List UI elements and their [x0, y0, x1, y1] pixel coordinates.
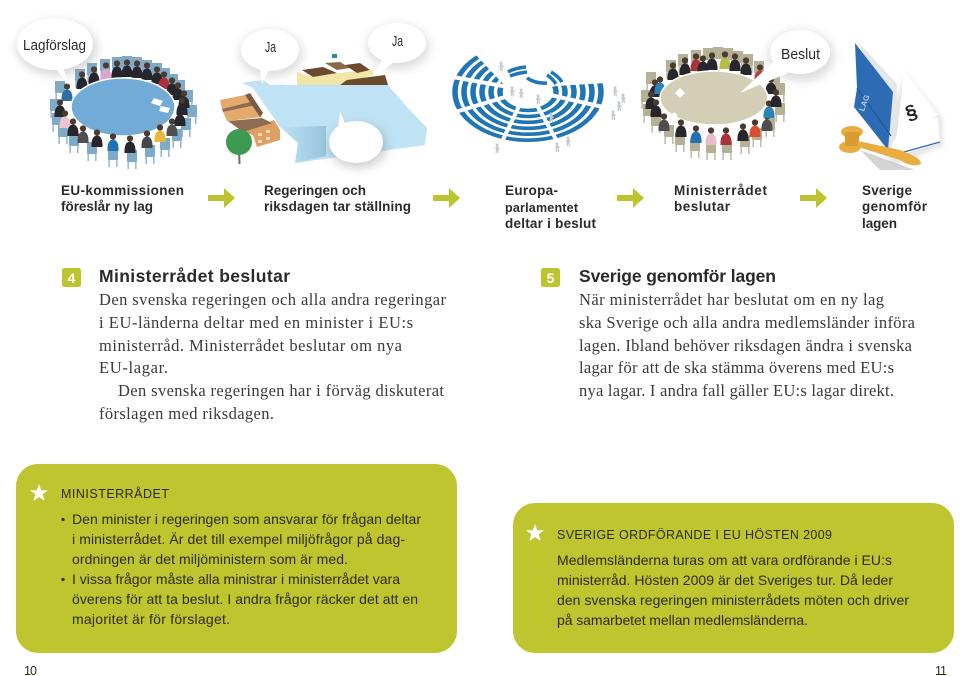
seated people: EU-kommissionen [54, 59, 190, 128]
aisle cuts [442, 75, 616, 152]
front people: EU-kommissionen [67, 97, 188, 153]
chairs: EU-kommissionen [50, 56, 198, 169]
body text 4: i EU-länderna deltar med en minister i EU:s [99, 313, 413, 332]
arrow 1 [208, 188, 235, 208]
label: Europaparlamentet: parlamentet [505, 201, 579, 215]
section 4: Ministerrådet beslutar [62, 266, 446, 423]
heading 5: Sverige genomför lagen [579, 266, 776, 286]
top seat arcs [508, 67, 562, 84]
box bullet text: i ministerrådet. Är det till exempel miljöfrågor på dag- [72, 531, 405, 547]
book shadow [880, 72, 943, 165]
illustration: Ministerrådet round table [640, 47, 786, 160]
riksdag building [297, 54, 388, 85]
front people: Ministerrådet [658, 89, 782, 145]
body text 5 [579, 290, 916, 400]
badge 5 [541, 268, 560, 287]
book cover [854, 43, 893, 150]
speech bubble: Lagförslag: Lagförslag [23, 37, 86, 54]
speech bubble: Ja regeringen [240, 29, 302, 84]
erased upper area [440, 30, 622, 88]
spine label: LAG [857, 93, 872, 112]
label: Regeringen och riksdagen: riksdagen tar ställning [264, 199, 411, 214]
box bullet text: ordningen är det miljöministern som är med. [72, 551, 348, 567]
body text 4: ministerråd. Ministerrådet beslutar om nya [99, 336, 403, 355]
body text 5: lagar för att de ska stämma överens med EU:s [579, 358, 894, 377]
book pages [888, 117, 940, 157]
blue map shape [242, 80, 427, 163]
body text 4: Den svenska regeringen har i förväg diskuterat [118, 381, 444, 400]
arrow 3 [617, 188, 644, 208]
label: Regeringen och riksdagen: Regeringen och [264, 183, 366, 198]
speech bubble: Lagförslag [17, 18, 97, 85]
heading 4: Ministerrådet beslutar [99, 266, 290, 286]
box bullet text: I vissa frågor måste alla ministrar i ministerrådet vara [72, 571, 400, 587]
body text 4: EU-lagar. [99, 358, 168, 377]
box text [557, 552, 909, 628]
label: Sverige genomför lagen: lagen [862, 216, 897, 231]
arrow 2 [433, 188, 460, 208]
body text 4: förslagen med riksdagen. [99, 404, 274, 423]
gavel [839, 126, 921, 170]
speech bubble: empty [329, 112, 387, 168]
panel: Sverige ordförande fact box [513, 503, 954, 653]
badge 5: 5 [547, 270, 555, 286]
speech bubble: Ja riksdagen [367, 23, 429, 76]
label: EU-kommissionen [61, 183, 184, 214]
tree [226, 129, 252, 164]
illustration: EU-kommissionen round table [50, 56, 198, 169]
chairs: Ministerrådet [640, 47, 786, 160]
illustration: Regeringen och riksdagen [220, 54, 427, 164]
label: Sverige genomför lagen: genomför [862, 199, 928, 214]
badge 4: 4 [68, 270, 76, 286]
government building [220, 93, 280, 147]
badge 4 [62, 268, 81, 287]
body text 4 [99, 290, 446, 423]
speech bubble: Beslut [740, 30, 834, 93]
box text: Medlemsländerna turas om att vara ordförande i EU:s [557, 552, 892, 568]
label: EU-kommissionen: föreslår ny lag [61, 199, 153, 214]
label: Regeringen och riksdagen [264, 183, 411, 214]
panel: Ministerrådet fact box [16, 464, 457, 653]
body text 5: nya lagar. I andra fall gäller EU:s lagar direkt. [579, 381, 894, 400]
label: Sverige genomför lagen [862, 183, 928, 231]
label: Ministerrådet [674, 183, 768, 214]
label: Europaparlamentet: deltar i beslut [505, 216, 596, 231]
label: EU-kommissionen: EU-kommissionen [61, 183, 184, 198]
box title: SVERIGE ORDFÖRANDE I EU HÖSTEN 2009 [557, 528, 832, 542]
illustration: law book and gavel [839, 42, 943, 170]
label: Ministerrådet: Ministerrådet [674, 183, 768, 198]
body text 5: lagen. Ibland behöver riksdagen ändra i svenska [579, 336, 913, 355]
box bullet text [61, 511, 421, 627]
body text 5: När ministerrådet har beslutat om en ny lag [579, 290, 884, 309]
table: EU-kommissionen [71, 78, 175, 136]
box bullet text: överens för att ta beslut. I andra frågor räcker det att en [72, 591, 418, 607]
section 5: Sverige genomför lagen [541, 266, 916, 400]
arrow 4 [800, 188, 827, 208]
box text: ministerråd. Hösten 2009 är det Sveriges tur. Då leder [557, 572, 893, 588]
papers on table: Ministerrådet [669, 88, 685, 120]
speech bubble: Beslut: Beslut [781, 46, 821, 63]
step labels row [61, 183, 928, 231]
box text: den svenska regeringen ministerrådets möten och driver [557, 592, 909, 608]
papers on table [151, 98, 170, 113]
paragraph sign: § [902, 100, 920, 125]
icon: star [30, 484, 48, 501]
speech bubble: Ja regeringen: Ja [265, 39, 276, 56]
box title: MINISTERRÅDET [61, 486, 169, 501]
label: Europaparlamentet: Europa- [505, 183, 558, 198]
label: Sverige genomför lagen: Sverige [862, 183, 912, 198]
label: Europaparlamentet [505, 183, 596, 231]
table: Ministerrådet [660, 71, 768, 125]
label: Ministerrådet: beslutar [674, 199, 731, 214]
body text 5: ska Sverige och alla andra medlemsländer införa [579, 313, 916, 332]
paper sheet [897, 67, 938, 135]
illustration: Europaparlamentet seating [440, 30, 626, 153]
box text: på samarbetet mellan medlemsländerna. [557, 612, 808, 628]
seated people: Ministerrådet [645, 51, 777, 117]
box bullet text: Den minister i regeringen som ansvarar för frågan deltar [72, 511, 421, 527]
speech bubble: Ja riksdagen: Ja [392, 33, 403, 50]
small figures [494, 62, 626, 153]
box bullet text: majoritet är för förslaget. [72, 611, 230, 627]
icon: star [526, 524, 544, 541]
seat rings [455, 44, 601, 140]
body text 4: Den svenska regeringen och alla andra regeringar [99, 290, 446, 309]
